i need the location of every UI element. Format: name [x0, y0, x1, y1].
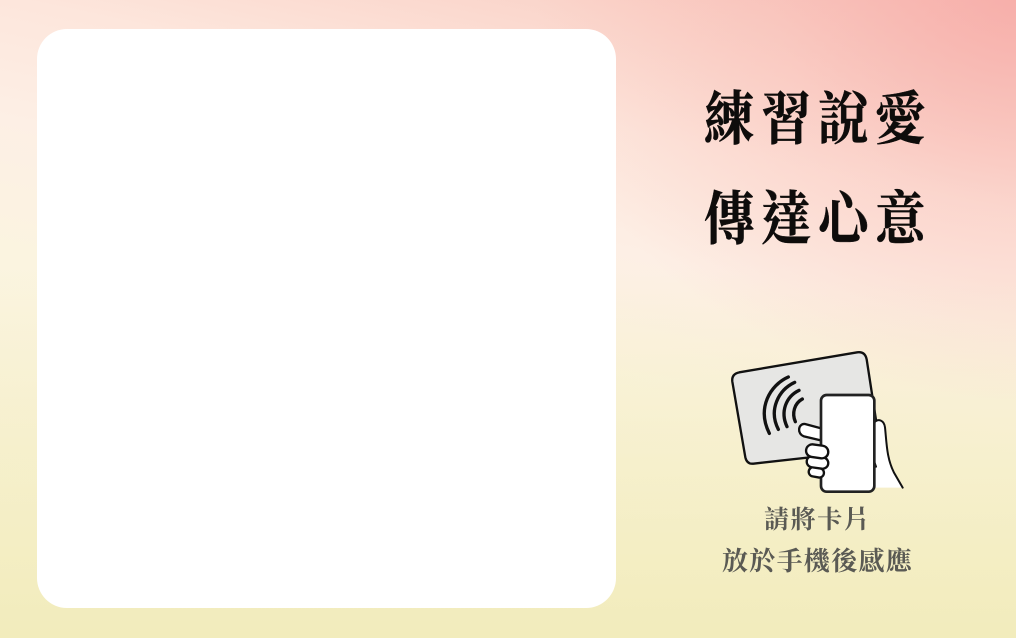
phone [821, 395, 874, 492]
index finger [799, 424, 825, 441]
icon: phone tapping NFC card [731, 351, 904, 493]
instruction line 2: 放於手機後感應 [722, 547, 913, 576]
title line 2: 傳達心意 [704, 187, 932, 252]
panel: white card area [37, 29, 616, 608]
hand palm and thumb [870, 420, 903, 488]
NFC card [732, 352, 876, 464]
title [704, 87, 932, 252]
fingers [805, 444, 829, 478]
instruction text [722, 506, 913, 576]
instruction line 1: 請將卡片 [764, 507, 870, 534]
contactless waves [764, 377, 802, 433]
title line 1: 練習說愛 [704, 87, 932, 152]
